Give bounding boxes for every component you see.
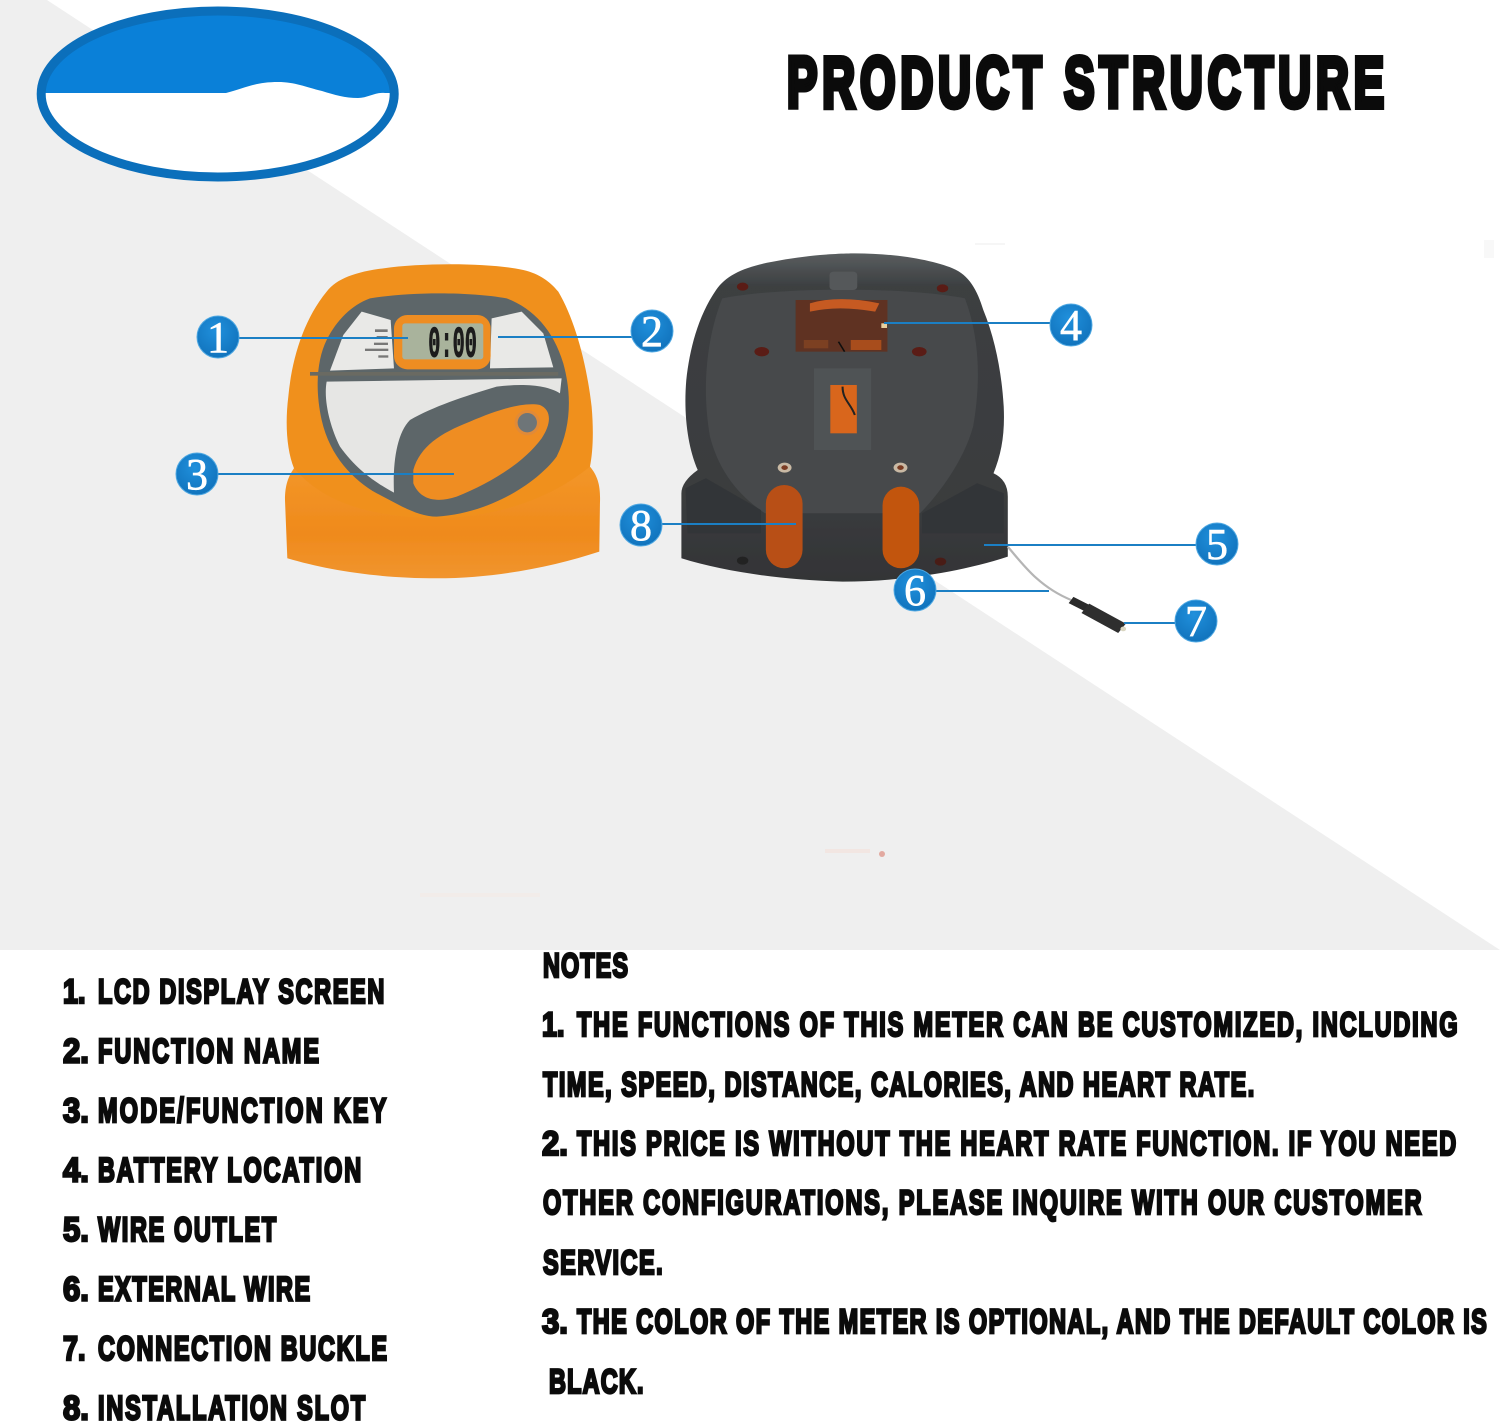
- legend item 5: 5.: [63, 1209, 89, 1248]
- legend item 3: 3.: [63, 1090, 89, 1129]
- callout 7: [1124, 597, 1217, 646]
- callout 1: [197, 313, 408, 362]
- connector: [1071, 600, 1126, 631]
- callout 6: 6: [904, 566, 926, 615]
- LCD frame: [394, 315, 491, 369]
- note 1: TIME, SPEED, DISTANCE, CALORIES, AND HEART RATE.: [543, 1066, 1254, 1104]
- note 3: THE COLOR OF THE METER IS OPTIONAL, AND THE DEFAULT COLOR IS: [577, 1303, 1487, 1341]
- notes heading: NOTES: [543, 947, 628, 985]
- legend item 6: EXTERNAL WIRE: [98, 1270, 310, 1309]
- lower white panel: [326, 378, 562, 493]
- legend item 4: BATTERY LOCATION: [98, 1151, 361, 1190]
- note 3: [542, 1301, 1487, 1401]
- title: PRODUCT STRUCTURE: [787, 43, 1384, 122]
- wire window: [814, 368, 871, 450]
- note 1: [542, 1005, 1458, 1104]
- logo: blue oval badge: [30, 0, 405, 177]
- mount tab: [830, 272, 857, 290]
- base shadow patches: [685, 478, 1004, 533]
- callout 2: [498, 307, 673, 356]
- device: meter back view: [681, 253, 1126, 631]
- callout 1: 1: [207, 313, 229, 362]
- legend item 2: FUNCTION NAME: [98, 1032, 319, 1071]
- callout 7: 7: [1185, 597, 1207, 646]
- inner back panel: [706, 290, 978, 513]
- callout 5: 5: [1206, 520, 1228, 569]
- legend item 6: 6.: [63, 1269, 89, 1308]
- callout 3: [176, 450, 454, 499]
- device: orange meter front view: [285, 264, 600, 578]
- legend item 1: 1.: [63, 972, 85, 1011]
- battery compartment: [796, 299, 887, 352]
- callout 5: [984, 520, 1238, 569]
- note 3: BLACK.: [549, 1363, 644, 1401]
- function labels: [365, 329, 388, 358]
- callout 4: 4: [1060, 301, 1082, 350]
- device: orange meter front view: 0:00: [428, 321, 477, 371]
- callout 6: [894, 566, 1049, 615]
- legend item 1: LCD DISPLAY SCREEN: [98, 973, 384, 1011]
- note 2: SERVICE.: [543, 1244, 663, 1282]
- round button: [515, 410, 540, 435]
- mounting studs: [778, 463, 907, 473]
- legend item 2: 2.: [63, 1031, 89, 1070]
- callout 8: [620, 501, 796, 550]
- callout 4: [884, 301, 1092, 350]
- oval key: [413, 404, 549, 500]
- notes block: [542, 947, 1487, 1401]
- note 2: [542, 1123, 1456, 1282]
- device base: [285, 467, 600, 578]
- legend item 7: 7.: [63, 1329, 85, 1368]
- parts legend list: [63, 972, 387, 1424]
- note 2: OTHER CONFIGURATIONS, PLEASE INQUIRE WITH OUR CUSTOMER: [543, 1184, 1422, 1222]
- legend item 4: 4.: [63, 1150, 89, 1189]
- callout 8: 8: [630, 501, 652, 550]
- note 2: 2.: [542, 1123, 568, 1162]
- legend item 5: WIRE OUTLET: [98, 1211, 276, 1249]
- note 2: THIS PRICE IS WITHOUT THE HEART RATE FUNCTION. IF YOU NEED: [577, 1125, 1456, 1163]
- LCD screen: [402, 323, 483, 359]
- legend item 7: CONNECTION BUCKLE: [98, 1330, 387, 1368]
- top left white panel: [330, 312, 394, 371]
- top right white panel: [490, 312, 553, 368]
- screw holes: [737, 283, 948, 566]
- divider: [310, 372, 558, 376]
- device body: [287, 264, 593, 543]
- back body: [681, 253, 1008, 582]
- installation slots: [766, 485, 803, 568]
- note 3: 3.: [542, 1301, 568, 1340]
- legend item 3: MODE/FUNCTION KEY: [98, 1092, 387, 1130]
- callout 2: 2: [641, 307, 663, 356]
- dark grey faceplate: [318, 293, 569, 517]
- note 1: 1.: [542, 1005, 564, 1044]
- note 1: THE FUNCTIONS OF THIS METER CAN BE CUSTOMIZED, INCLUDING: [577, 1006, 1458, 1044]
- external wire: [1008, 547, 1071, 600]
- callout 3: 3: [186, 450, 208, 499]
